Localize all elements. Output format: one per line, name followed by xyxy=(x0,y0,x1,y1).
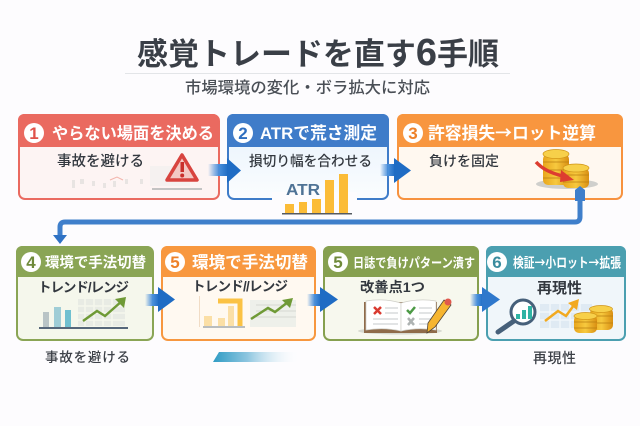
heading: 許容損失→ロット逆算 xyxy=(428,120,596,144)
number 5: 5 xyxy=(170,253,180,272)
arrow: step 4 to 5 xyxy=(145,287,175,312)
number 1 xyxy=(24,123,44,143)
heading: 環境で手法切替 xyxy=(45,254,146,272)
title: 感覚トレードを直す6手順 xyxy=(137,32,499,74)
panel: step 4 xyxy=(16,246,153,340)
panel: step 3 xyxy=(397,114,623,201)
panel: step 6 xyxy=(486,246,626,340)
heading: 検証→小ロット→拡張 xyxy=(513,252,621,272)
number 2: 2 xyxy=(238,124,248,143)
arrow: step 2 to 3 xyxy=(380,158,411,183)
body text: 再現性 xyxy=(537,280,582,297)
heading: やらない場面を決める xyxy=(52,125,214,143)
connector start overlay xyxy=(575,186,585,201)
connector arrow: step 3 to step 4 xyxy=(53,189,580,244)
number 3: 3 xyxy=(408,124,418,143)
panel: step 2 xyxy=(227,114,389,214)
number 5: 5 xyxy=(333,253,343,272)
icon: warning triangle xyxy=(167,155,197,180)
heading: ATRで荒さ測定 xyxy=(260,124,377,143)
body text: トレンド//レンジ xyxy=(192,279,288,294)
body text: 改善点1つ xyxy=(360,279,425,295)
ATR label: ATR xyxy=(286,182,320,199)
decorative streak xyxy=(213,352,300,362)
icon: open notebook and pencil xyxy=(358,298,452,334)
heading: 日誌で負けパターン潰す xyxy=(353,256,475,270)
caption: reproducibility: 再現性 xyxy=(533,350,576,366)
number 5 xyxy=(165,252,185,272)
number 2 xyxy=(233,123,253,143)
panel: step 5 journal xyxy=(323,246,479,340)
number 4: 4 xyxy=(26,253,36,272)
body text: 損切り幅を合わせる xyxy=(249,153,372,169)
number 6: 6 xyxy=(492,253,502,272)
arrow: journal to step 6 xyxy=(470,287,500,312)
arrow: step 1 to 2 xyxy=(208,158,241,183)
number 3 xyxy=(403,123,423,143)
body text: 負けを固定 xyxy=(429,153,499,169)
number 1: 1 xyxy=(29,124,39,143)
bar chart: ATR xyxy=(282,174,352,214)
faint chart xyxy=(72,166,190,188)
icon: magnifier, line and coins xyxy=(498,299,613,333)
subtitle: 市場環境の変化・ボラ拡大に対応 xyxy=(185,79,430,97)
body text: 事故を避ける xyxy=(57,153,144,170)
body text: トレンド/レンジ xyxy=(38,280,129,295)
panel: step 1 xyxy=(18,114,219,199)
icon: orange chart and green arrow xyxy=(199,296,296,328)
caption: avoid accidents: 事故を避ける xyxy=(45,350,130,365)
icon: charts with green arrow xyxy=(39,297,128,329)
arrow: step 5 to journal xyxy=(307,287,338,312)
heading: 環境で手法切替 xyxy=(192,252,309,272)
number 5 xyxy=(328,252,348,272)
icon: coins with red arrow xyxy=(536,150,598,189)
panel: step 5 xyxy=(161,246,316,340)
